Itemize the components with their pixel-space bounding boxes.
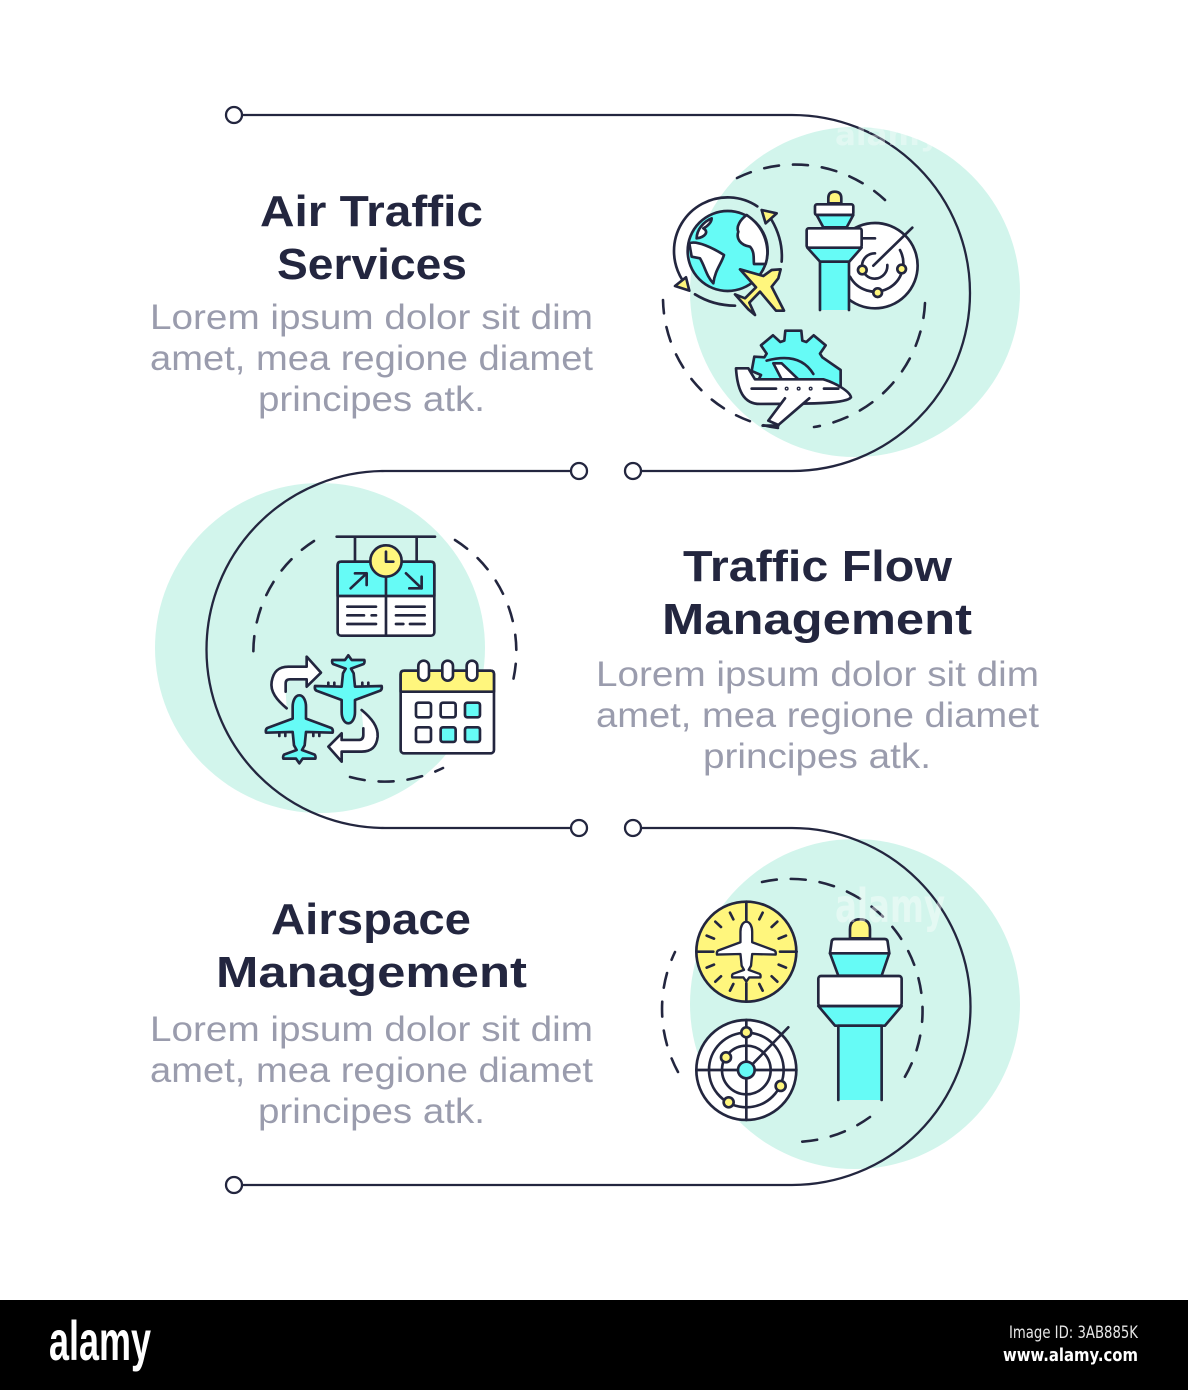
watermark top: alamy [835,118,940,153]
body text 2 [596,655,1039,776]
node 2 bottom [571,820,587,836]
icon: yellow plane [735,269,784,315]
icon: rerouting arrows [271,657,378,762]
icon: large control tower [818,919,902,1100]
body text 3 [150,1010,593,1131]
body text 1: amet, mea regione diamet [150,339,593,378]
body text 3: principes atk. [258,1092,485,1131]
icon: gear and airliner [736,331,851,426]
connector line 1 [243,115,970,471]
icon: plane nose down [315,655,382,723]
footer logo: alamy [49,1309,151,1372]
icon: radar scope [696,1020,796,1120]
connector line 3 [243,828,971,1185]
body text 1: Lorem ipsum dolor sit dim [150,298,593,337]
body text 2: Lorem ipsum dolor sit dim [596,655,1039,694]
body text 2: principes atk. [703,737,931,776]
icon: airspace cluster [696,902,902,1120]
body text 1: principes atk. [258,380,485,419]
body text 1 [150,298,593,419]
node 2 top [571,463,587,479]
dashed ring 3 [662,879,923,1142]
heading: air traffic services: Air Traffic [260,187,483,236]
image id: Image ID: 3AB885K [1009,1323,1139,1343]
heading: traffic flow management: Management [662,595,972,644]
icon: globe with orbit arrows [674,197,782,306]
heading: air traffic services: Services [277,240,467,289]
body text 3: Lorem ipsum dolor sit dim [150,1010,593,1049]
website: www.alamy.com [1003,1345,1138,1366]
node 3 top [625,820,641,836]
start node 1 [226,107,242,123]
icon: compass with plane [696,902,797,1002]
background blob 1 [690,127,1020,457]
body text 3: amet, mea regione diamet [150,1051,593,1090]
icon: traffic flow cluster [266,537,494,763]
panel: airspace management [150,820,1020,1193]
dashed ring 1 [663,165,925,428]
heading: airspace management: Airspace [271,895,471,944]
heading: airspace management: Management [216,948,527,997]
icon: control tower [807,192,862,310]
icon: air traffic services cluster [674,192,918,426]
footer bar [0,1300,1188,1390]
body text 2: amet, mea regione diamet [596,696,1039,735]
watermark lower: alamy [835,879,945,933]
end node 3 [226,1177,242,1193]
icon: departures board with clock [337,537,435,636]
panel: air traffic services [150,107,1020,479]
background blob 2 [155,483,485,813]
heading: traffic flow management: Traffic Flow [683,542,953,591]
panel: traffic flow management [155,463,1039,836]
end node 1 [625,463,641,479]
heading: traffic flow management [662,542,972,644]
background blob 3 [690,839,1020,1169]
icon: plane nose up [266,695,333,763]
dashed ring 2 [253,540,516,782]
icon: radar [832,223,918,308]
icon: calendar [401,661,494,753]
heading: airspace management [216,895,527,997]
heading: air traffic services [260,187,483,289]
connector line 2 [206,471,570,828]
